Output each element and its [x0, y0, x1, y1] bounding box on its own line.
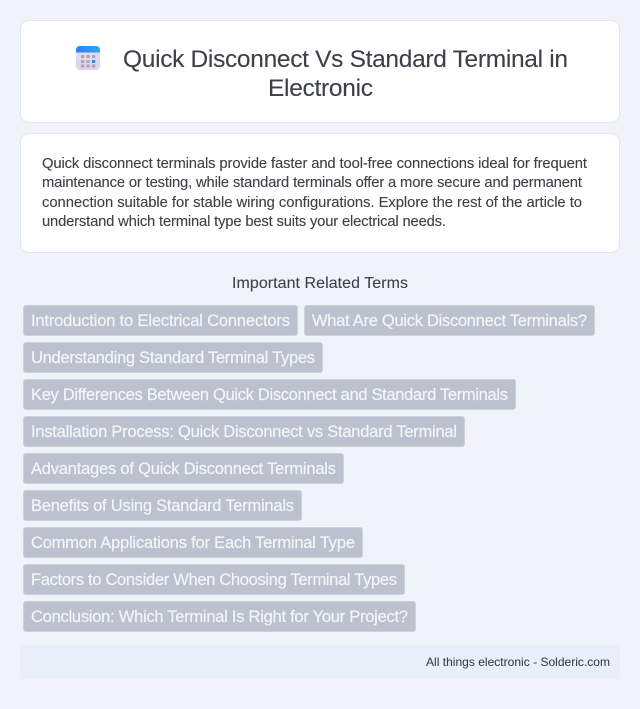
panel: title card — [20, 20, 620, 122]
footer: All things electronic - Solderic.com — [426, 655, 610, 669]
tag: Understanding Standard Terminal Types — [31, 349, 315, 367]
tag: Common Applications for Each Terminal Type — [31, 534, 355, 552]
intro paragraph — [42, 156, 587, 230]
title: Electronic — [268, 75, 373, 102]
intro paragraph: understand which terminal type best suits your electrical needs. — [42, 214, 446, 230]
tag: Advantages of Quick Disconnect Terminals — [31, 460, 336, 478]
tag: Key Differences Between Quick Disconnect and Standard Terminals — [31, 386, 508, 404]
intro paragraph: maintenance or testing, while standard terminals offer a more secure and permanent — [42, 175, 582, 191]
tag: Conclusion: Which Terminal Is Right for Your Project? — [31, 608, 408, 626]
tag — [304, 306, 594, 336]
tag — [24, 564, 404, 594]
footer — [20, 645, 620, 679]
intro paragraph: connection suitable for stable wiring configurations. Explore the rest of the article to — [42, 195, 582, 211]
intro paragraph: Quick disconnect terminals provide faster and tool-free connections ideal for frequent — [42, 156, 587, 172]
title — [123, 46, 568, 102]
tag: Installation Process: Quick Disconnect vs Standard Terminal — [31, 423, 457, 441]
tag — [24, 380, 516, 410]
tag — [24, 306, 298, 336]
panel: intro text — [20, 134, 620, 252]
tag: Introduction to Electrical Connectors — [31, 312, 290, 330]
tag — [24, 528, 362, 558]
tag — [24, 342, 322, 372]
tag: What Are Quick Disconnect Terminals? — [312, 312, 587, 330]
tag: Factors to Consider When Choosing Terminal Types — [31, 571, 397, 589]
tag — [24, 454, 344, 484]
title: Quick Disconnect Vs Standard Terminal in — [123, 46, 568, 73]
tag — [24, 416, 464, 446]
icon: calendar — [76, 46, 100, 70]
tag — [24, 602, 416, 632]
tag list — [24, 306, 594, 632]
tag — [24, 490, 302, 520]
tag: Benefits of Using Standard Terminals — [31, 497, 294, 515]
heading: important related terms: Important Related Terms — [232, 275, 408, 292]
